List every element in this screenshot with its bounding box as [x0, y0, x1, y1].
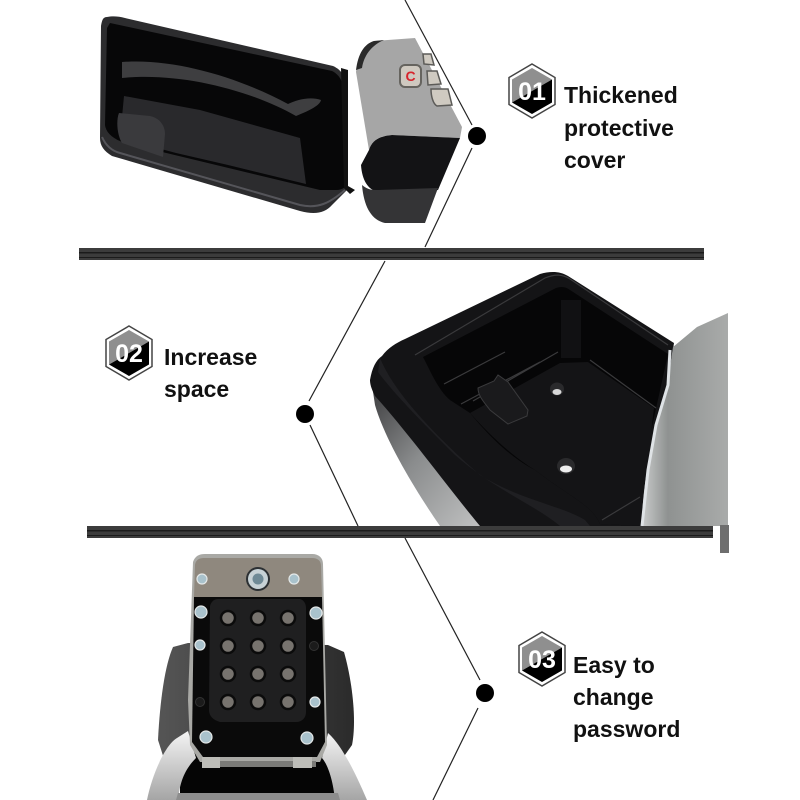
connector line 1 — [405, 0, 472, 247]
lid shell — [100, 16, 347, 213]
white front right — [322, 733, 367, 800]
photo: open box interior — [370, 272, 728, 526]
dot 3 — [476, 684, 494, 702]
button C: C — [405, 68, 416, 84]
dot 1 — [468, 127, 486, 145]
open door — [642, 313, 728, 526]
lid upper ridge highlight — [122, 61, 321, 116]
rear body — [158, 643, 354, 762]
white front left — [147, 731, 196, 800]
lid pad — [117, 113, 165, 157]
text 02: Increase — [164, 344, 257, 370]
screw holes — [550, 382, 575, 474]
text 01: protective — [564, 115, 674, 141]
rim highlight — [378, 358, 590, 526]
badge 03: 03 — [528, 646, 556, 674]
text 03: password — [573, 716, 680, 742]
badge 01: 01 — [518, 78, 546, 106]
connector line 2 — [309, 261, 385, 526]
badge 02: 02 — [115, 340, 143, 368]
plate top metal — [194, 558, 322, 597]
keypad buttons — [221, 611, 295, 709]
bottom front — [176, 793, 340, 800]
keypad block — [209, 599, 306, 722]
lock body lower — [362, 185, 438, 223]
text 02: space — [164, 376, 229, 402]
hinge — [341, 68, 355, 194]
plate black — [192, 597, 325, 757]
interior floor — [470, 362, 654, 526]
text 01: Thickened — [564, 82, 678, 108]
lock body black — [361, 135, 460, 192]
gray side wall — [372, 385, 490, 526]
interior ledges — [415, 275, 668, 520]
connector line 3 — [405, 538, 480, 800]
interior — [423, 287, 668, 526]
badge 03 — [519, 632, 565, 686]
lid interior — [105, 23, 347, 190]
text 03: Easy to — [573, 652, 655, 678]
center bolt — [246, 567, 270, 591]
interior post — [561, 300, 581, 358]
dot 2 — [296, 405, 314, 423]
lock body gray — [356, 38, 462, 150]
plate frame — [188, 554, 327, 762]
screws — [195, 574, 322, 744]
buttons keypad — [423, 54, 452, 106]
text 03: change — [573, 684, 654, 710]
button C — [400, 65, 421, 87]
photo: open protective cover — [100, 16, 462, 223]
badge 01 — [509, 64, 555, 118]
black rim — [370, 272, 674, 526]
divider bar 1 — [79, 248, 704, 260]
hinge strip — [202, 757, 316, 768]
door edge — [642, 350, 670, 526]
lock top edge — [356, 40, 384, 70]
text 01: cover — [564, 147, 625, 173]
empty screw holes — [196, 642, 318, 706]
badge 02 — [106, 326, 152, 380]
divider bar 2 — [87, 526, 713, 538]
door remnant — [720, 525, 729, 553]
lower cavity — [180, 750, 335, 794]
photo: keypad — [147, 554, 367, 800]
latch — [478, 375, 528, 424]
lid tray — [120, 96, 306, 184]
lid rim — [102, 137, 345, 206]
